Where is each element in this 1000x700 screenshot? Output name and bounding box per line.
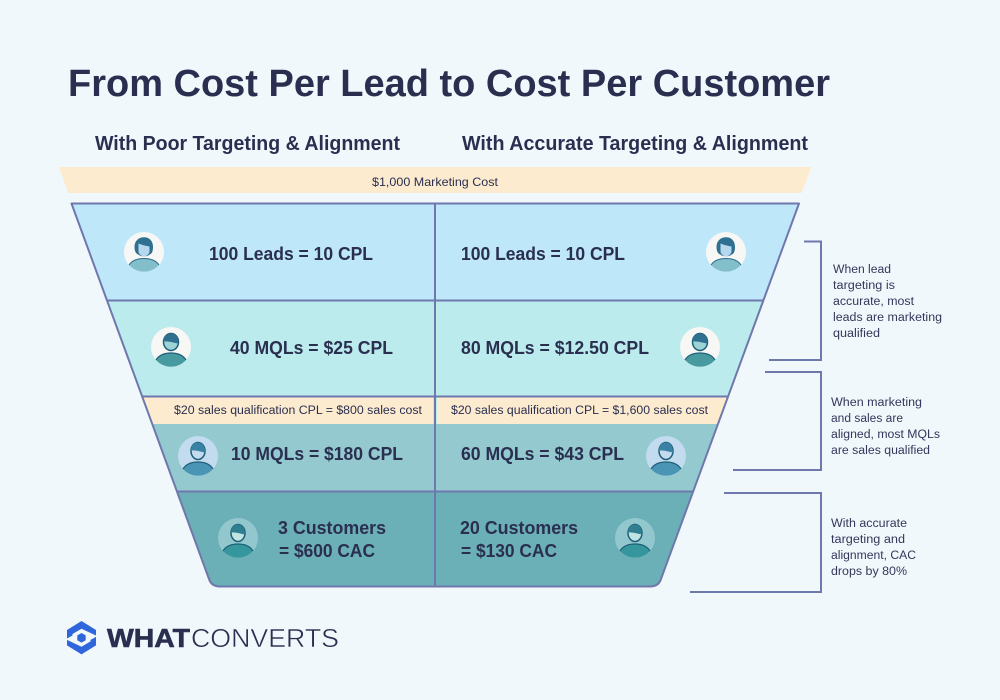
callout: CAC drop: targeting and [831,534,905,546]
icon: logo hexagon [67,621,96,654]
label: sales cost right: $20 sales qualification CPL = $1,600 sales cost [451,405,709,417]
label: 20 customers [460,518,578,561]
icon: person row 2 left [151,327,191,367]
label: 80 MQLs: 80 MQLs = $12.50 CPL [461,338,649,358]
heading: poor targeting column: With Poor Targeting & Alignment [95,133,400,155]
title: From Cost Per Lead to Cost Per Customer [68,63,830,105]
sales qualification band left [142,396,433,424]
marketing cost band [59,167,812,193]
icon: person row 2 right [680,327,720,367]
icon: person row 4 right [615,518,655,558]
funnel outline [72,204,799,586]
label: 100 leads right: 100 Leads = 10 CPL [461,244,625,264]
funnel stage: leads [72,204,799,300]
icon: person row 4 left [218,518,258,558]
bracket: CAC [690,493,821,592]
logo wordmark: WHAT [107,623,190,653]
callout: lead targeting: accurate, most [833,296,915,308]
label: 20 customers: 20 Customers [460,518,578,538]
row divider lines [107,204,764,586]
label: 3 customers: = $600 CAC [279,541,375,561]
callout: marketing and sales: are sales qualified [831,445,930,457]
callout: CAC drop: With accurate [831,518,907,530]
logo: WhatConverts [67,621,339,654]
label: 20 customers: = $130 CAC [461,541,557,561]
icon: person row 1 left [124,232,164,272]
callout: lead targeting: leads are marketing [833,312,942,324]
callout: CAC drop: drops by 80% [831,566,907,578]
label: sales cost left: $20 sales qualification CPL = $800 sales cost [174,405,423,417]
heading: accurate targeting column: With Accurate Targeting & Alignment [462,133,808,155]
bracket: marketing and sales [733,372,821,470]
callout: marketing and sales: aligned, most MQLs [831,429,940,441]
bracket: lead targeting [769,242,821,360]
callout: CAC drop [831,518,916,578]
label: 60 MQLs: 60 MQLs = $43 CPL [461,444,624,464]
label: 3 customers: 3 Customers [278,518,386,538]
icon: person row 3 right [646,436,686,476]
funnel stage: sales qualified MQLs [152,424,718,492]
callout: marketing and sales [831,397,940,457]
icon: person row 1 right [706,232,746,272]
callout: lead targeting: targeting is [833,280,895,292]
divider gap fill [433,397,437,424]
label: 3 customers [278,518,386,561]
callout: CAC drop: alignment, CAC [831,550,916,562]
funnel stage: customers [177,492,694,586]
callout: marketing and sales: and sales are [831,413,903,425]
label: 40 MQLs: 40 MQLs = $25 CPL [230,338,393,358]
callout: marketing and sales: When marketing [831,397,922,409]
logo: WhatConverts: CONVERTS [191,623,339,653]
label: 100 leads left: 100 Leads = 10 CPL [209,244,373,264]
callout: lead targeting: When lead [833,264,891,276]
icon: person row 3 left [178,436,218,476]
funnel chart [72,204,799,586]
callout: lead targeting: qualified [833,328,880,340]
funnel stage: MQLs [107,300,764,396]
label: 10 MQLs: 10 MQLs = $180 CPL [231,444,403,464]
sales qualification band right [437,396,728,424]
marketing cost band: $1,000 Marketing Cost [372,175,499,189]
callout: lead targeting [833,264,942,340]
